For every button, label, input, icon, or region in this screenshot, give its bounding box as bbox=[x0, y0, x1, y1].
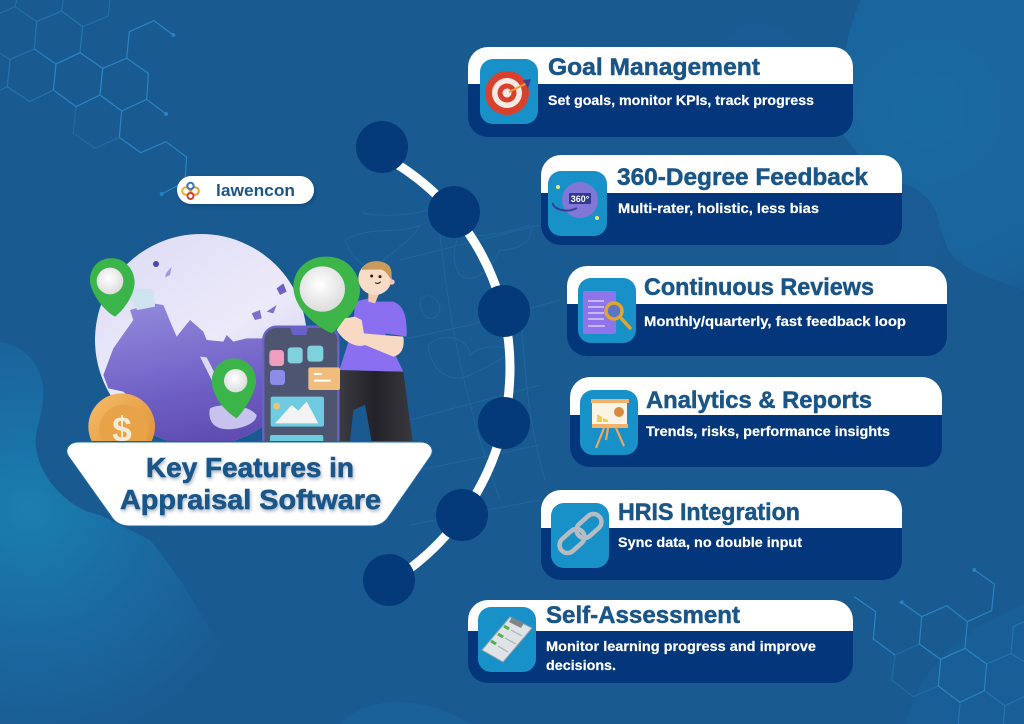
illustration: globe, pins, phone and person bbox=[88, 234, 413, 460]
heading: Appraisal Software bbox=[120, 484, 381, 515]
heading: Analytics & Reports bbox=[646, 387, 872, 414]
icon: logo knot bbox=[182, 183, 199, 199]
text: Multi-rater, holistic, less bias bbox=[618, 201, 819, 216]
icon: chain link bbox=[551, 503, 609, 568]
icon: arm and hand bbox=[337, 317, 404, 357]
icon: coin bbox=[88, 393, 155, 441]
heading: Self-Assessment bbox=[546, 602, 740, 629]
icon: green pin small bbox=[212, 358, 256, 418]
text: Set goals, monitor KPIs, track progress bbox=[548, 93, 814, 108]
icon: 360 globe: 360° bbox=[571, 194, 590, 204]
logo wordmark: lawencon bbox=[216, 181, 295, 200]
logo pill bbox=[177, 176, 314, 204]
icon: clipboard bbox=[478, 607, 536, 672]
icon: large green pin bbox=[293, 257, 360, 333]
icon: coin: $ bbox=[112, 411, 132, 450]
panel: goal management bbox=[468, 47, 853, 137]
heading bbox=[120, 452, 381, 515]
icon: phone bbox=[262, 326, 340, 441]
text: Trends, risks, performance insights bbox=[646, 424, 890, 439]
icon: presentation board bbox=[580, 390, 638, 455]
hexagon network top-left bbox=[0, 0, 187, 196]
text: Monthly/quarterly, fast feedback loop bbox=[644, 314, 906, 329]
text: decisions. bbox=[546, 658, 616, 673]
panel: 360-degree feedback bbox=[541, 155, 902, 245]
panel: continuous reviews bbox=[567, 266, 947, 356]
heading: 360-Degree Feedback bbox=[617, 164, 869, 191]
icon: person bbox=[338, 261, 413, 442]
icon: 360 globe bbox=[548, 171, 607, 236]
connector arc bbox=[375, 152, 510, 582]
timeline nodes bbox=[356, 121, 530, 606]
text bbox=[546, 639, 817, 673]
heading: Continuous Reviews bbox=[644, 274, 874, 301]
heading: HRIS Integration bbox=[618, 499, 800, 526]
text: Monitor learning progress and improve bbox=[546, 639, 817, 654]
panel: hris integration bbox=[541, 490, 902, 580]
icon: target bbox=[480, 59, 538, 124]
hexagon network bottom-right bbox=[854, 568, 1024, 724]
icon: green pin left bbox=[90, 258, 135, 317]
heading: Key Features in bbox=[146, 452, 354, 483]
faint world map lines bbox=[345, 195, 560, 525]
title panel bbox=[67, 442, 432, 526]
panel: self-assessment bbox=[468, 600, 853, 683]
icon: globe bbox=[95, 234, 306, 441]
phone card lines bbox=[314, 374, 331, 381]
icon: document magnifier bbox=[578, 278, 636, 343]
text: Sync data, no double input bbox=[618, 535, 803, 550]
panel: analytics and reports bbox=[570, 377, 942, 467]
heading: Goal Management bbox=[548, 54, 760, 81]
